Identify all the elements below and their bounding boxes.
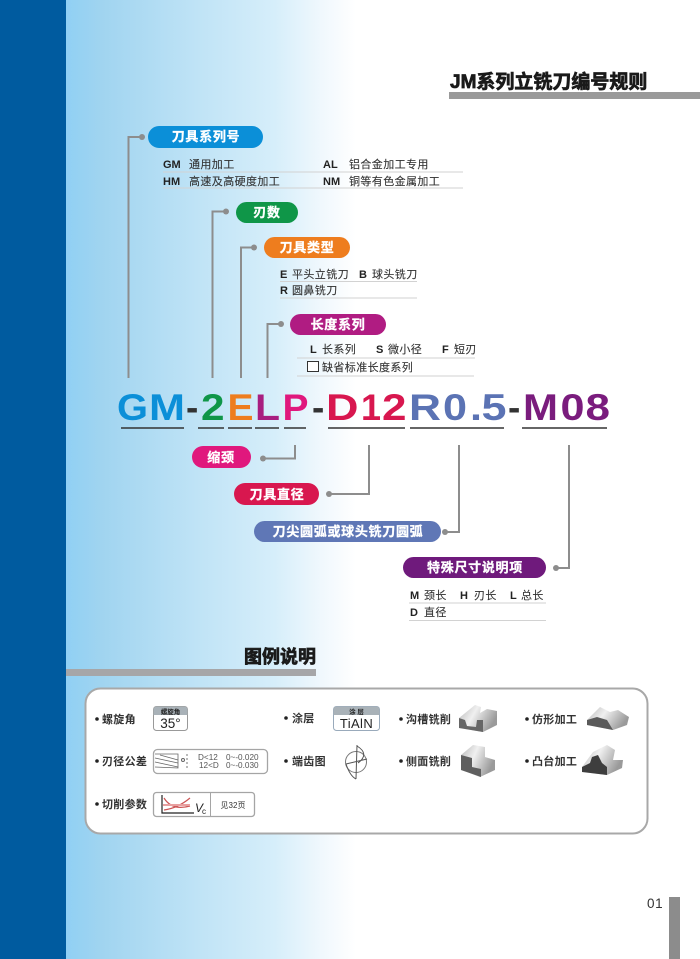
profile milling legend [525,707,629,730]
panel: tool series: 铜等有色金属加工 [349,174,440,188]
tolerance legend [95,750,268,774]
coating legend: 涂 层 [349,707,364,716]
code string: GM-2ELP-D12R0.5-M08: P [282,387,308,428]
panel: flute count [212,202,298,378]
side milling legend [399,745,495,777]
code string: GM-2ELP-D12R0.5-M08: R [409,387,441,428]
cutting parameters legend: 切削参数 [102,797,147,811]
panel: length series: F [442,344,449,356]
panel: tool series: 刀具系列号 [172,129,240,144]
code string: GM-2ELP-D12R0.5-M08: 5 [482,387,506,428]
panel: length series: 长系列 [322,342,356,356]
panel: length series: 长度系列 [311,317,365,332]
panel: tool type: E [280,269,287,281]
panel: special dimensions: 特殊尺寸说明项 [427,560,523,575]
coating legend [284,706,380,731]
coating legend: 涂层 [292,711,315,725]
panel: neck: 缩颈 [207,450,235,465]
panel: length series [268,314,477,378]
page number: 01 [647,896,663,911]
panel: tool series: 高速及高硬度加工 [189,174,280,188]
slot milling legend [399,705,497,732]
panel: length series: 缺省标准长度系列 [322,360,413,374]
cutting parameters legend: V [195,801,204,815]
tolerance legend: D<12 [198,753,218,762]
helix angle legend [95,706,188,731]
code string: GM-2ELP-D12R0.5-M08: 2 [201,387,224,428]
coating legend: TiAlN [340,716,373,731]
code string: GM-2ELP-D12R0.5-M08: G [117,387,148,428]
panel: length series: 短刃 [454,342,477,356]
code string: GM-2ELP-D12R0.5-M08: M [149,387,185,428]
page tab [669,897,680,959]
helix angle legend: 螺旋角 [161,707,180,716]
panel: special dimensions: M [410,590,419,602]
code underlines [121,427,607,429]
code string: GM-2ELP-D12R0.5-M08: 1 [361,387,381,428]
panel: special dimensions: H [460,590,468,602]
helix angle legend: 35° [160,716,181,731]
end teeth legend [284,745,367,779]
left blue strip [0,0,66,959]
legend heading [66,647,316,676]
code string: GM-2ELP-D12R0.5-M08: 2 [382,387,406,428]
title: JM系列立铣刀编号规则 [450,70,647,93]
panel: tool series: HM [163,176,180,188]
code string: GM-2ELP-D12R0.5-M08: - [508,387,520,428]
panel: corner radius [254,445,459,542]
panel: tool diameter [234,445,369,505]
code string: GM-2ELP-D12R0.5-M08: 8 [586,387,610,428]
panel: tool type [241,237,418,378]
end teeth legend: 端齿图 [292,754,326,768]
code string: GM-2ELP-D12R0.5-M08: M [523,387,558,428]
panel: tool type: 平头立铣刀 [292,267,349,281]
panel: tool type: R [280,285,288,297]
panel: flute count: 刃数 [253,205,281,220]
panel: tool diameter: 刀具直径 [250,487,304,502]
panel: tool series: GM [163,159,181,171]
legend heading: 图例说明 [244,647,316,667]
boss milling legend [525,745,623,775]
panel: length series: L [310,344,317,356]
cutting parameters legend [95,792,254,816]
code string: GM-2ELP-D12R0.5-M08 [117,387,610,428]
panel: tool type: 刀具类型 [280,240,334,255]
cutting parameters legend: 见32页 [221,801,245,810]
panel: tool series: NM [323,176,340,188]
code string: GM-2ELP-D12R0.5-M08: - [186,387,198,428]
code string: GM-2ELP-D12R0.5-M08: . [470,387,482,428]
panel: length series: S [376,344,383,356]
tolerance legend: 刃径公差 [102,754,147,768]
cutting parameters legend: c [202,807,206,816]
panel: tool type: 圆鼻铣刀 [292,283,338,297]
panel: special dimensions: 总长 [521,588,544,602]
panel: tool type: B [359,269,367,281]
panel: special dimensions: 刃长 [474,589,497,602]
panel: special dimensions: 直径 [424,605,447,619]
panel: corner radius: 刀尖圆弧或球头铣刀圆弧 [273,524,423,539]
code string: GM-2ELP-D12R0.5-M08: 0 [560,387,584,428]
panel: neck [192,445,295,468]
panel: legend [86,688,648,834]
panel: tool series [128,126,463,378]
panel: tool series: AL [323,159,338,171]
title [449,70,700,99]
code string: GM-2ELP-D12R0.5-M08: 0 [443,387,467,428]
helix angle legend: 螺旋角 [102,712,136,726]
code string: GM-2ELP-D12R0.5-M08: D [326,387,358,428]
tolerance legend: 12<D [199,761,219,770]
code string: GM-2ELP-D12R0.5-M08: - [312,387,324,428]
panel: special dimensions: D [410,607,418,619]
tolerance legend: 0~-0.020 [226,753,259,762]
panel: special dimensions: 颈长 [424,589,447,602]
panel: tool series: 通用加工 [189,158,235,171]
panel: special dimensions: L [510,590,517,602]
code string: GM-2ELP-D12R0.5-M08: E [228,387,254,428]
profile milling legend: 仿形加工 [532,712,577,726]
panel: special dimensions [403,445,569,620]
panel: tool series: 铝合金加工专用 [349,157,429,171]
boss milling legend: 凸台加工 [532,754,577,768]
side milling legend: 侧面铣削 [406,754,451,768]
tolerance legend: 0~-0.030 [226,761,259,770]
panel: tool type: 球头铣刀 [372,267,418,281]
slot milling legend: 沟槽铣削 [406,712,451,726]
code string: GM-2ELP-D12R0.5-M08: L [255,387,280,428]
panel: length series: 微小径 [388,342,422,356]
